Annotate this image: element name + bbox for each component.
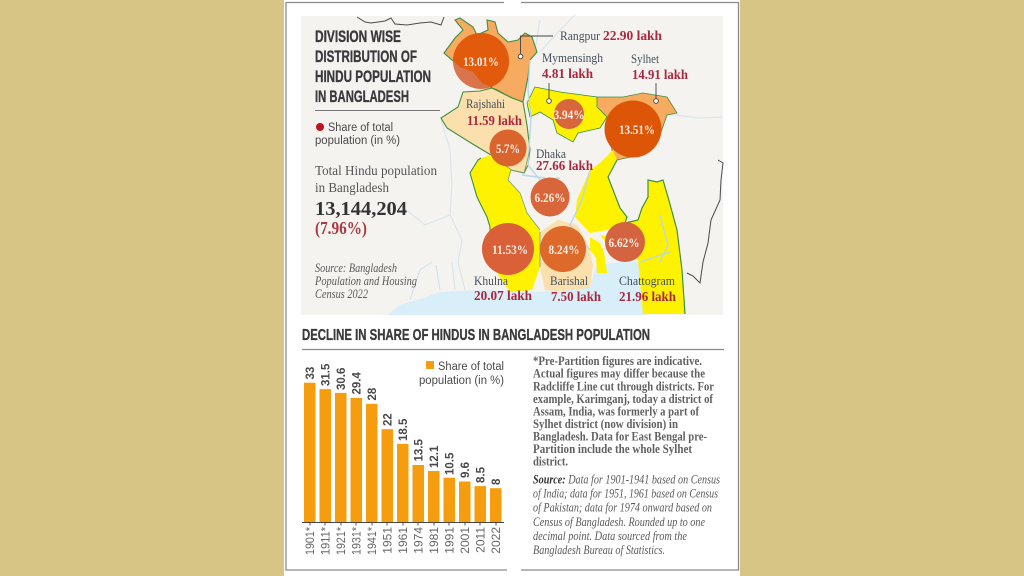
- chart legend: population (in %): [419, 375, 504, 387]
- bar values: 31.5: [320, 363, 332, 386]
- bar values: 18.5: [398, 418, 410, 441]
- bar values: 30.6: [336, 368, 348, 390]
- chart source note: [533, 472, 720, 557]
- year labels: 1991: [442, 527, 456, 554]
- region: Sylhet: [597, 93, 677, 160]
- footnote: Assam, India, was formerly a part of: [533, 405, 700, 419]
- chart legend: [419, 361, 504, 387]
- bar values: 28: [367, 387, 379, 400]
- bar values: 9.6: [460, 462, 472, 478]
- total Hindu population: 13,144,204: [315, 198, 407, 220]
- year labels: 1961: [396, 527, 410, 554]
- bars: [304, 383, 502, 522]
- bar values: 10.5: [444, 452, 456, 475]
- bar values: [305, 363, 503, 485]
- circle: Rangpur 13.01%: [453, 33, 509, 89]
- footnote: Radcliffe Line cut through districts. For: [533, 379, 714, 393]
- footnote: Partition include the whole Sylhet: [533, 442, 693, 456]
- label: Khulna: Khulna: [474, 274, 508, 288]
- label: Dhaka: [536, 147, 593, 174]
- division boundaries: [508, 150, 540, 267]
- label: Sylhet: [631, 52, 688, 103]
- axis: [302, 522, 504, 526]
- circle: Khulna 11.53%: 11.53%: [492, 242, 528, 257]
- year labels: 2022: [489, 527, 503, 554]
- year labels: 1941*: [365, 527, 379, 555]
- circle: Sylhet 13.51%: 13.51%: [619, 122, 655, 137]
- circle: Barishal 8.24%: [540, 226, 586, 272]
- bar values: 33: [305, 367, 317, 380]
- map source: Census 2022: [315, 287, 368, 301]
- title rule: [315, 110, 440, 112]
- year labels: 2011: [474, 527, 488, 553]
- circle: Mymensingh 3.94%: 3.94%: [554, 107, 584, 122]
- inland rivers: [522, 60, 670, 262]
- title: IN BANGLADESH: [315, 88, 409, 106]
- label: Khulna: [474, 274, 532, 304]
- label: Chattogram: [619, 274, 676, 305]
- label: Dhaka: 27.66 lakh: [536, 159, 593, 174]
- map source: Source: Bangladesh: [315, 261, 397, 275]
- region: Chattogram east: [625, 180, 685, 314]
- chart source note: decimal point. Data sourced from the: [533, 529, 687, 543]
- label: Barishal: 7.50 lakh: [551, 290, 601, 305]
- label: Rajshahi: [466, 97, 522, 129]
- total Hindu population: Total Hindu population: [315, 163, 437, 178]
- panel: map: [301, 15, 723, 315]
- bar values: 12.1: [429, 445, 441, 468]
- map legend: [315, 122, 400, 147]
- label: Rangpur: Rangpur: [560, 29, 601, 43]
- year labels: 1981: [427, 527, 441, 554]
- circle: Sylhet 13.51%: [604, 100, 662, 158]
- circle: Rangpur 13.01%: 13.01%: [463, 54, 499, 69]
- chart source note: of Pakistan; data for 1974 onward based on: [533, 501, 712, 515]
- bar values: 8: [491, 478, 503, 485]
- bar chart: [302, 361, 504, 555]
- year labels: 1901*: [303, 527, 317, 555]
- region: Khulna: [470, 155, 540, 292]
- year labels: 2001: [458, 527, 472, 554]
- chart legend: Share of total: [438, 361, 504, 373]
- year labels: 1911*: [318, 527, 332, 555]
- label: Chattogram: Chattogram: [619, 274, 675, 288]
- circle: Dhaka 6.26%: 6.26%: [534, 190, 566, 205]
- region: Barishal: [540, 220, 593, 291]
- label: Sylhet: Sylhet: [631, 52, 659, 66]
- section heading: DECLINE IN SHARE OF HINDUS IN BANGLADESH POPULATION: [302, 327, 650, 344]
- label: Rajshahi: Rajshahi: [466, 97, 505, 111]
- label: Barishal: Barishal: [550, 274, 588, 288]
- title: [315, 28, 431, 106]
- year labels: 1921*: [334, 527, 348, 555]
- footnote: Actual figures may differ because the: [533, 367, 705, 381]
- footnote: [533, 354, 714, 468]
- label: Mymensingh: 4.81 lakh: [542, 67, 593, 82]
- bar values: 29.4: [352, 372, 364, 394]
- label: Rajshahi: 11.59 lakh: [467, 114, 522, 129]
- year labels: 1951: [380, 527, 394, 554]
- map source: [314, 261, 417, 301]
- islands: [590, 235, 620, 273]
- sea: [387, 262, 646, 315]
- circle: Rajshahi 5.7%: [490, 130, 526, 166]
- label: Rangpur: [518, 29, 662, 59]
- bar values: 13.5: [414, 439, 426, 462]
- year labels: 1931*: [350, 527, 364, 555]
- title: HINDU POPULATION: [315, 68, 431, 86]
- label: Barishal: [550, 274, 601, 305]
- label: Khulna: 20.07 lakh: [474, 289, 532, 304]
- year labels: [303, 527, 503, 555]
- label: Sylhet: 14.91 lakh: [632, 68, 688, 83]
- chart source note: Source: Data for 1901-1941 based on Census: [533, 472, 720, 486]
- bar values: 22: [382, 413, 394, 426]
- map source: Population and Housing: [314, 274, 417, 288]
- map legend: population (in %): [315, 135, 400, 147]
- region: Rangpur: [444, 18, 537, 102]
- footnote: *Pre-Partition figures are indicative.: [533, 354, 702, 368]
- total Hindu population: [315, 163, 437, 239]
- footnote: district.: [533, 454, 568, 468]
- region: Rajshahi: [441, 88, 530, 173]
- label: Mymensingh: Mymensingh: [542, 51, 604, 65]
- circle: Khulna 11.53%: [482, 223, 534, 275]
- circle: Rajshahi 5.7%: 5.7%: [496, 141, 520, 156]
- chart source note: of India; data for 1951, 1961 based on Census: [533, 487, 718, 501]
- total Hindu population: (7.96%): [315, 218, 367, 239]
- chart source note: Census of Bangladesh. Rounded up to one: [533, 515, 705, 529]
- label: Rangpur: 22.90 lakh: [603, 29, 662, 44]
- region: Chattogram west: [575, 150, 627, 233]
- title: DISTRIBUTION OF: [315, 48, 417, 66]
- label: Mymensingh: [542, 51, 604, 103]
- footnote: Bangladesh. Data for East Bengal pre-: [533, 430, 707, 444]
- label: Dhaka: Dhaka: [536, 147, 566, 161]
- circle: Barishal 8.24%: 8.24%: [548, 242, 580, 257]
- neighbouring borders and rivers: [357, 15, 723, 300]
- section rule: [302, 348, 724, 350]
- circle: Dhaka 6.26%: [530, 178, 570, 216]
- chart source note: Bangladesh Bureau of Statistics.: [533, 543, 665, 557]
- bar values: 8.5: [476, 466, 488, 483]
- footnote: example, Karimganj, today a district of: [533, 392, 714, 406]
- white card: [284, 0, 740, 576]
- circle: Chattogram 6.62%: [605, 222, 645, 262]
- circle: Mymensingh 3.94%: [554, 99, 584, 129]
- label: Chattogram: 21.96 lakh: [619, 290, 676, 305]
- total Hindu population: in Bangladesh: [315, 180, 389, 195]
- title: DIVISION WISE: [315, 28, 401, 46]
- circle: Chattogram 6.62%: 6.62%: [608, 235, 640, 250]
- region: Mymensingh: [527, 87, 607, 142]
- border: eastern frontier: [608, 160, 685, 314]
- footnote: Sylhet district (now division) in: [533, 417, 678, 431]
- map legend: Share of total: [328, 122, 393, 134]
- year labels: 1974: [412, 527, 426, 554]
